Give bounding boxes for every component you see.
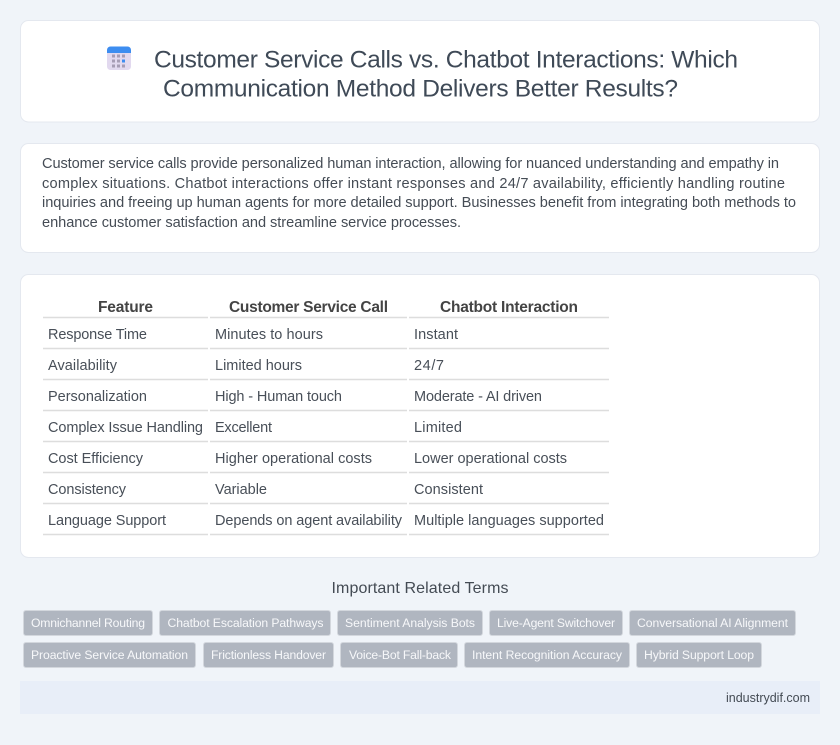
text block: introduction: inquiries and freeing up human agents for more detailed support. Businesses benefit from integrating both methods to bbox=[42, 195, 796, 211]
row: personalization: Moderate - AI driven bbox=[414, 389, 542, 405]
table header bbox=[98, 299, 578, 316]
row: availability: Limited hours bbox=[215, 358, 302, 374]
row: availability: Availability bbox=[48, 358, 118, 374]
row: response time bbox=[48, 327, 458, 343]
row: complex issue handling: Limited bbox=[414, 420, 462, 436]
tag: frictionless handover: Frictionless Handover bbox=[211, 648, 326, 662]
row: personalization: Personalization bbox=[48, 389, 147, 405]
row: response time: Instant bbox=[414, 327, 458, 343]
tag: intent recognition accuracy bbox=[464, 642, 630, 668]
row: personalization bbox=[48, 389, 542, 405]
row: consistency bbox=[48, 482, 483, 498]
heading: important related terms: Important Related Terms bbox=[332, 580, 508, 597]
tag: voice-bot fall-back bbox=[340, 642, 458, 668]
tag: chatbot escalation pathways: Chatbot Escalation Pathways bbox=[168, 616, 324, 630]
title: Communication Method Delivers Better Results? bbox=[163, 76, 678, 102]
row: availability bbox=[48, 358, 444, 374]
tag: voice-bot fall-back: Voice-Bot Fall-back bbox=[349, 648, 452, 662]
row: response time: Minutes to hours bbox=[215, 327, 323, 343]
tag: hybrid support loop bbox=[636, 642, 762, 668]
tag: conversational ai alignment: Conversational AI Alignment bbox=[637, 616, 789, 630]
row: complex issue handling: Complex Issue Handling bbox=[48, 420, 203, 436]
panel: header bbox=[20, 20, 820, 122]
tag: chatbot escalation pathways bbox=[160, 610, 330, 636]
table header: Customer Service Call bbox=[229, 299, 388, 316]
panel: comparison table bbox=[20, 274, 820, 558]
tag: live-agent switchover: Live-Agent Switchover bbox=[497, 616, 615, 630]
table grid lines bbox=[43, 318, 609, 534]
tag: proactive service automation: Proactive Service Automation bbox=[31, 648, 188, 662]
tag: hybrid support loop: Hybrid Support Loop bbox=[644, 648, 754, 662]
title bbox=[154, 46, 738, 102]
row: consistency: Consistent bbox=[414, 482, 483, 498]
tag: proactive service automation bbox=[24, 642, 196, 668]
row: language support: Depends on agent availability bbox=[215, 513, 403, 529]
panel: introduction bbox=[20, 144, 820, 252]
row: complex issue handling bbox=[48, 420, 462, 436]
tag: intent recognition accuracy: Intent Recognition Accuracy bbox=[472, 648, 623, 662]
text block: introduction bbox=[42, 156, 796, 231]
tag: conversational ai alignment bbox=[630, 610, 796, 636]
row: personalization: High - Human touch bbox=[215, 389, 342, 405]
footer credit: industrydif.com bbox=[726, 691, 810, 705]
table header: Feature bbox=[98, 299, 153, 316]
footer bar bbox=[20, 681, 820, 714]
title: Customer Service Calls vs. Chatbot Interactions: Which bbox=[154, 46, 738, 74]
icon: calendar app bbox=[107, 46, 131, 70]
row: language support bbox=[48, 513, 604, 529]
row: cost efficiency bbox=[48, 451, 567, 467]
row: response time: Response Time bbox=[48, 327, 147, 343]
text block: introduction: Customer service calls provide personalized human interaction, allowing for nuanced understanding and empathy in bbox=[42, 156, 779, 172]
row: cost efficiency: Higher operational costs bbox=[215, 451, 372, 467]
tag: omnichannel routing: Omnichannel Routing bbox=[31, 616, 145, 630]
tag: sentiment analysis bots: Sentiment Analysis Bots bbox=[345, 616, 475, 630]
row: consistency: Variable bbox=[215, 482, 267, 498]
text block: introduction: enhance customer satisfaction and streamline service processes. bbox=[42, 215, 461, 231]
row: cost efficiency: Lower operational costs bbox=[414, 451, 567, 467]
row: cost efficiency: Cost Efficiency bbox=[48, 451, 144, 467]
row: availability: 24/7 bbox=[414, 358, 444, 374]
tag: frictionless handover bbox=[204, 642, 334, 668]
row: language support: Multiple languages supported bbox=[414, 513, 604, 529]
tag: omnichannel routing bbox=[24, 610, 152, 636]
row: language support: Language Support bbox=[48, 513, 166, 529]
tag: live-agent switchover bbox=[490, 610, 622, 636]
text block: introduction: complex situations. Chatbot interactions offer instant responses and 24/7 availability, efficiently handling routine bbox=[42, 176, 785, 192]
row: consistency: Consistency bbox=[48, 482, 127, 498]
tag: sentiment analysis bots bbox=[338, 610, 482, 636]
row: complex issue handling: Excellent bbox=[215, 420, 272, 436]
table header: Chatbot Interaction bbox=[440, 299, 578, 316]
related term tags bbox=[24, 610, 796, 668]
